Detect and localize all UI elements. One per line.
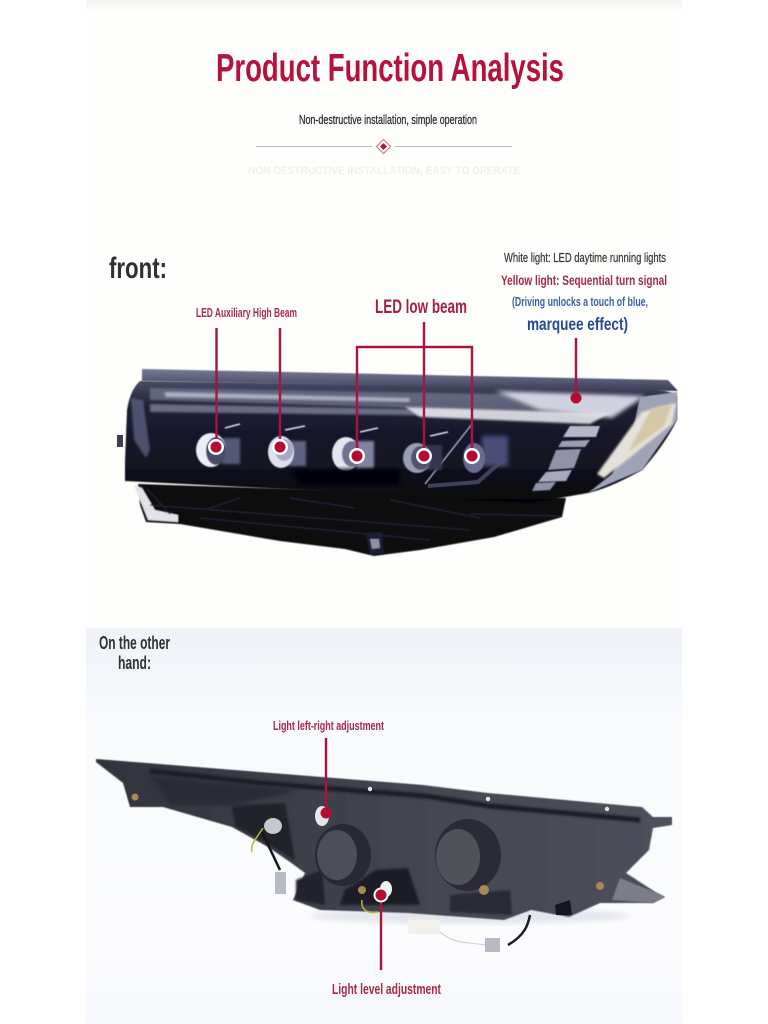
label: light left-right adjustment: Light left-right adjustment (273, 719, 385, 733)
subtitle: Non-destructive installation, simple operation (299, 113, 477, 127)
text block: light functions: Yellow light: Sequential turn signal (501, 272, 667, 288)
upper clear lens reflections (150, 388, 620, 412)
left adjuster bulb (315, 806, 329, 826)
faded subtitle in capitals: NON-DESTRUCTIVE INSTALLATION, EASY TO OPERATE (248, 165, 520, 177)
arm shading (150, 776, 300, 805)
side clip (117, 435, 123, 447)
projector lenses (196, 433, 508, 473)
right bracket (612, 878, 665, 903)
product photo: front of headlight (117, 369, 678, 556)
divider with diamond (256, 140, 512, 154)
yellow wire (362, 900, 378, 913)
callout lines: back (326, 738, 381, 970)
label: LED low beam: LED low beam (375, 296, 467, 318)
text block: light functions: (Driving unlocks a touch of blue, (512, 295, 648, 309)
upper rim (150, 771, 640, 820)
diagonal divider blade (425, 424, 472, 484)
housing (96, 759, 672, 920)
soft shadow (310, 908, 630, 924)
lower adjuster bulb (380, 881, 392, 897)
heading: on the other hand (99, 633, 170, 673)
lower connector and wire (408, 915, 530, 952)
small chrome glints (225, 424, 448, 436)
heading: front: front: (109, 252, 167, 285)
label: LED auxiliary high beam: LED Auxiliary High Beam (196, 306, 297, 320)
callout dots: front (208, 392, 582, 464)
screws on rim (368, 787, 609, 811)
title: Product Function Analysis (216, 47, 564, 90)
top strip (142, 369, 678, 391)
bolts (132, 794, 604, 895)
callout lines: front (216, 322, 576, 456)
lower housing (134, 484, 566, 556)
clear outer corner with amber reflector (588, 392, 677, 493)
recessed darker shapes (232, 803, 295, 860)
text block: light functions: marquee effect) (527, 314, 628, 334)
product photo: back of headlight (96, 759, 672, 952)
panel: lower background (86, 628, 682, 1024)
main lens body (125, 381, 677, 503)
text block: light functions: White light: LED daytime running lights (504, 251, 666, 265)
callout dots: back (320, 808, 388, 902)
panel: upper background (86, 0, 682, 628)
left dust cap (315, 824, 371, 886)
right dust cap (435, 819, 501, 891)
text block: light functions (501, 251, 667, 334)
connector and wires, left (252, 818, 286, 894)
heading: on the other hand: On the other (99, 633, 170, 653)
heading: on the other hand: hand: (118, 653, 151, 673)
left side reflection (131, 398, 150, 458)
dark shadow under lenses (290, 468, 400, 485)
turn signal segments (532, 426, 600, 491)
label: light level adjustment: Light level adjustment (332, 981, 441, 998)
